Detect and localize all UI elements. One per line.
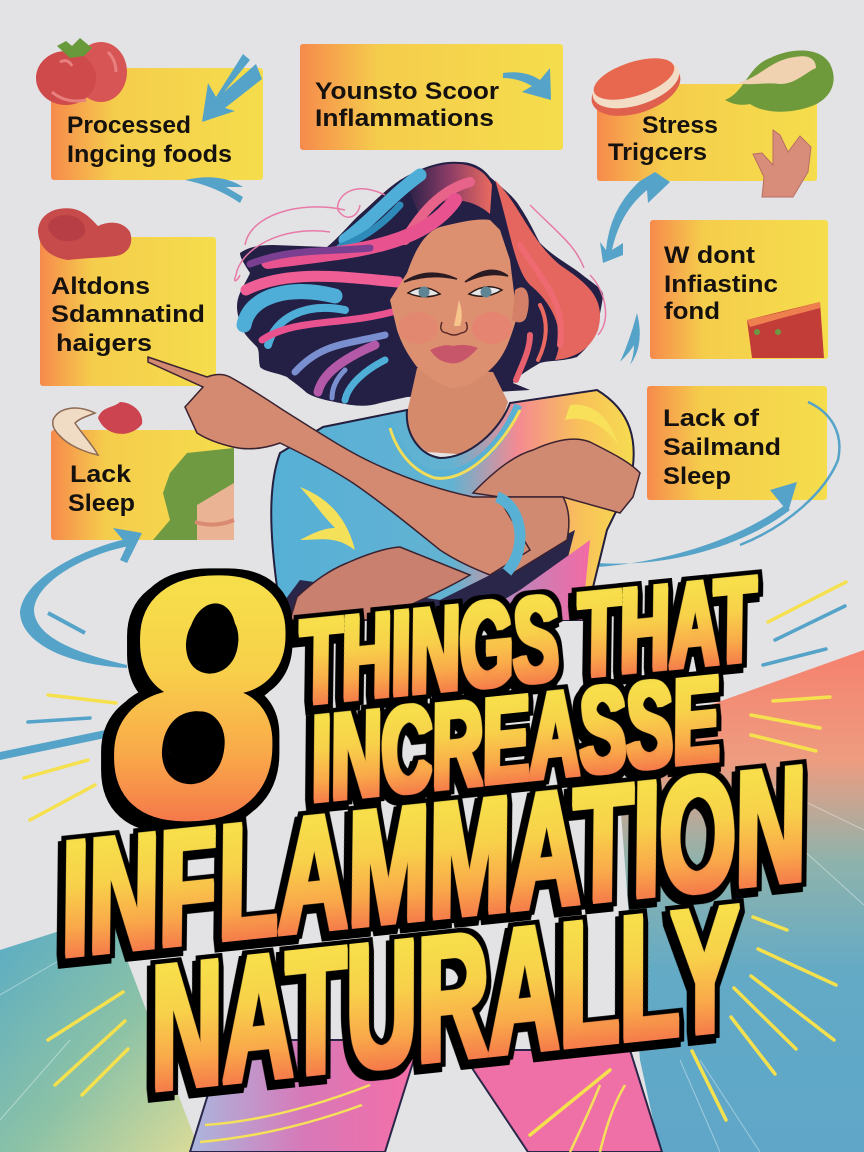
far hand on shoulder — [473, 439, 640, 513]
arrow: right swoosh — [597, 402, 839, 567]
label line 2: Infiastinc — [664, 271, 778, 298]
arrow: left swoosh — [20, 528, 142, 668]
decorative sunburst lines — [0, 582, 846, 1135]
sleeve yellow splash — [300, 487, 355, 550]
eye right — [469, 287, 502, 296]
hair crown — [405, 164, 492, 214]
arrow: small blue — [503, 68, 551, 100]
icon: nut — [53, 408, 98, 455]
shirt pink hem — [470, 540, 590, 620]
nose highlight — [454, 300, 462, 326]
panel: lack sleep — [51, 402, 234, 540]
hair left streaks — [244, 175, 470, 400]
panel: younsto scoor — [300, 44, 563, 150]
neck — [403, 368, 508, 455]
label line 2: Ingcing foods — [67, 141, 232, 168]
label: Lack — [70, 461, 132, 488]
iris left — [418, 286, 430, 298]
hair base — [237, 162, 603, 406]
icon: sliced meat — [585, 50, 687, 126]
nose — [441, 322, 467, 335]
pants left — [190, 1040, 420, 1152]
icon: red food — [747, 302, 824, 358]
panel: stress triggers — [585, 50, 834, 197]
lower forearm — [290, 547, 470, 620]
bracelet — [497, 497, 520, 572]
label: Processed — [67, 112, 191, 139]
left cheek blush — [398, 312, 438, 344]
shirt — [271, 390, 634, 620]
counters of the 8 — [163, 599, 241, 788]
title — [51, 507, 816, 1128]
hair right streaks — [516, 245, 561, 380]
label: Lack of — [663, 405, 760, 432]
face — [390, 219, 517, 388]
shirt lower dark area — [285, 530, 575, 620]
pants stripes — [200, 1085, 625, 1152]
icon: red steak — [38, 208, 131, 260]
label: W dont — [664, 242, 755, 269]
icon: green vegetable — [725, 50, 834, 112]
sleeve yellow streaks right — [565, 405, 618, 445]
arrow: small blue curve — [185, 177, 243, 203]
label line 2: Trigcers — [608, 139, 707, 166]
pants right — [460, 1050, 662, 1152]
right cheek blush — [472, 312, 512, 344]
label: Stress — [642, 112, 718, 139]
iris right — [480, 286, 492, 298]
icon: green head — [153, 448, 234, 540]
eye left — [408, 288, 440, 297]
label line 3: fond — [664, 298, 720, 325]
brows — [404, 270, 508, 282]
label line 3: haigers — [56, 330, 152, 357]
hair right fill — [495, 180, 600, 360]
upper arm near elbow — [500, 497, 569, 575]
panel: w dont — [650, 220, 828, 359]
right ear — [512, 287, 529, 322]
panel: processed foods — [36, 38, 263, 203]
label line 2: Sdamnatind — [51, 301, 205, 328]
label line 2: Inflammations — [315, 105, 494, 132]
arrow: blue down-left — [202, 54, 262, 122]
figure: woman — [148, 162, 662, 1152]
label line 2: Sleep — [68, 490, 135, 517]
pointing arm — [148, 357, 530, 575]
lips — [430, 345, 478, 363]
hair wisps — [235, 189, 606, 335]
label line 2: Sailmand — [663, 434, 781, 461]
label: Altdons — [51, 273, 150, 300]
label line 3: Sleep — [663, 463, 731, 490]
icon: red tomatoes — [36, 38, 127, 105]
label: Younsto Scoor — [315, 78, 499, 105]
arrow: small swoosh right of hair — [620, 313, 640, 365]
numeral 8: 8 — [112, 507, 286, 889]
collar yellow line — [390, 410, 520, 478]
icon: red berry — [98, 402, 142, 434]
panel: altdons — [38, 208, 216, 386]
arrow: curved two-headed — [600, 172, 670, 263]
collar — [388, 405, 518, 474]
panel: lack of salmand sleep — [647, 386, 827, 500]
icon: hand — [753, 130, 811, 197]
